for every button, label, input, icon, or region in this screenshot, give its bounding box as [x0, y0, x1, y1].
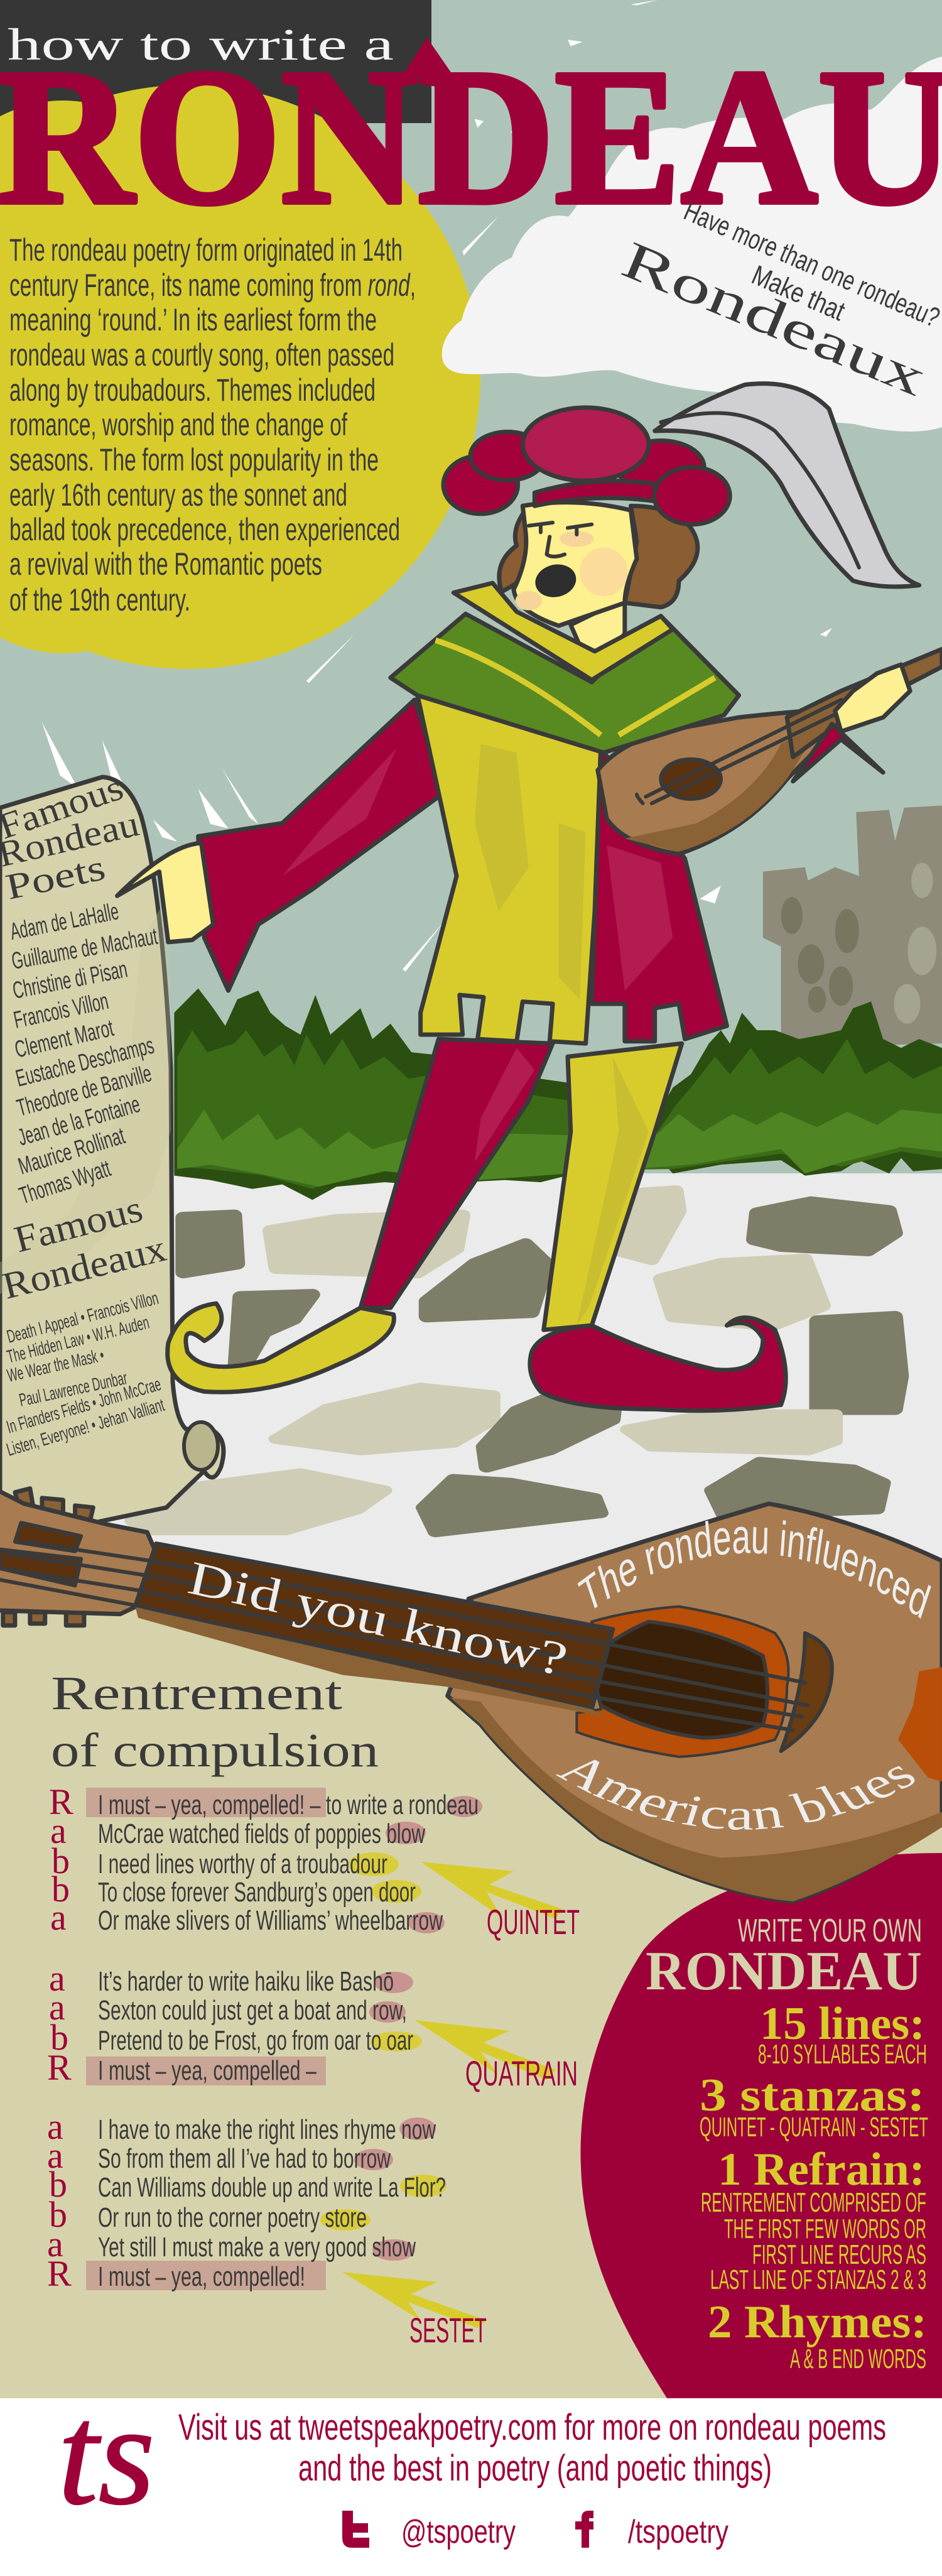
- face: [514, 503, 637, 626]
- poem stanza 3: [98, 2114, 446, 2292]
- hair: [499, 506, 698, 607]
- rhyme scheme letters: a: [47, 2106, 63, 2147]
- intro paragraph: meaning ‘round.’ In its earliest form the: [9, 302, 377, 337]
- arrow: sestet: [342, 2272, 487, 2328]
- intro paragraph: along by troubadours. Themes included: [9, 372, 376, 408]
- intro paragraph: early 16th century as the sonnet and: [9, 477, 347, 513]
- icon: twitter: [342, 2511, 369, 2548]
- list of poets: Theodore de Banville: [14, 1060, 154, 1122]
- list of poets: Christine di Pisan: [11, 956, 129, 1004]
- footer call to action: [178, 2407, 886, 2489]
- intro paragraph: seasons. The form lost popularity in the: [9, 442, 379, 477]
- facebook handle: /tspoetry: [628, 2514, 728, 2550]
- rhyme scheme letters: R: [47, 2047, 72, 2088]
- yellow curled shoe: [168, 1303, 394, 1392]
- list of poets: [8, 898, 160, 1210]
- icon: facebook: [575, 2511, 593, 2548]
- rhyme scheme letters: b: [49, 2194, 67, 2235]
- list of rondeaux: [4, 1288, 167, 1460]
- cobblestone ground: [0, 1173, 942, 1707]
- sound hole: [577, 1606, 789, 1757]
- right hand: [835, 665, 910, 732]
- poem stanza 3: Yet still I must make a very good show: [98, 2232, 416, 2263]
- rules list: 15 lines:: [760, 1998, 925, 2050]
- poem stanza 3: Or run to the corner poetry store: [98, 2202, 367, 2233]
- list of poets: Francois Villon: [11, 988, 111, 1034]
- left hand: [117, 843, 214, 942]
- curved text: the rondeau influenced: The rondeau influenced: [578, 1520, 931, 1619]
- list of rondeaux: Paul Lawrence Dunbar: [18, 1368, 129, 1411]
- sleeve: left arm: [198, 700, 445, 991]
- poem stanza 2: I must – yea, compelled –: [98, 2055, 317, 2086]
- cloud text: Rondeaux: [614, 231, 934, 408]
- poem stanza 1: To close forever Sandburg’s open door: [98, 1877, 416, 1908]
- list of rondeaux: We Wear the Mask •: [6, 1345, 106, 1386]
- red hat: [443, 408, 730, 524]
- curved text: american blues: American blues: [556, 1760, 914, 1830]
- red leg: [360, 1039, 553, 1308]
- rhyme scheme letters: b: [49, 2164, 67, 2205]
- rhyme scheme letters: R: [47, 2253, 72, 2294]
- orange patch: [898, 1667, 942, 1781]
- dark title banner: [0, 0, 431, 123]
- scroll heading: famous rondeau poets: [0, 766, 143, 908]
- scroll heading: famous rondeaux: Rondeaux: [0, 1227, 170, 1307]
- twitter handle: @tspoetry: [401, 2514, 516, 2550]
- stanza labels: [409, 1902, 580, 2350]
- intro paragraph: ballad took precedence, then experienced: [9, 512, 400, 547]
- intro paragraph: The rondeau poetry form originated in 14th: [9, 232, 403, 268]
- title kicker: how to write a: [8, 19, 394, 70]
- intro paragraph: romance, worship and the change of: [9, 407, 347, 442]
- poem stanza 1: I need lines worthy of a troubadour: [98, 1849, 387, 1879]
- lute body: [448, 1504, 942, 1901]
- cloud text: [614, 195, 942, 408]
- sage sky background: [0, 0, 942, 1256]
- footer call to action: and the best in poetry (and poetic things): [298, 2448, 772, 2489]
- list of poets: Adam de LaHalle: [8, 898, 121, 945]
- scroll heading: famous rondeaux: [0, 1188, 170, 1307]
- list of poets: Eustache Deschamps: [13, 1033, 156, 1092]
- rules list: 2 Rhymes:: [708, 2296, 927, 2348]
- feather: [655, 384, 919, 587]
- tunic: red half: [592, 748, 727, 1041]
- rules list: 3 stanzas:: [700, 2070, 925, 2121]
- poem stanza 1: Or make slivers of Williams’ wheelbarrow: [98, 1905, 443, 1936]
- rhyme scheme letters: b: [51, 1869, 70, 1910]
- intro paragraph: [9, 232, 416, 617]
- green cape with collar: [391, 583, 739, 753]
- intro paragraph: century France, its name coming from rond,: [9, 268, 416, 303]
- cloud text: Make that: [747, 259, 850, 327]
- stanza labels: QUINTET: [487, 1902, 580, 1942]
- scroll heading: famous rondeaux: Famous: [10, 1188, 147, 1261]
- rhyme scheme letters: a: [47, 2224, 63, 2264]
- rhyme scheme letters: b: [51, 1840, 70, 1881]
- scroll of famous poets: [0, 766, 224, 1523]
- yellow sun circle: [0, 85, 480, 669]
- scroll heading: famous rondeau poets: Poets: [2, 847, 109, 908]
- red curled shoe: [530, 1318, 786, 1411]
- poem stanza 3: Can Williams double up and write La Flor?: [98, 2172, 446, 2203]
- logo: ts: ts: [58, 2374, 155, 2535]
- stanza labels: QUATRAIN: [465, 2053, 578, 2093]
- small lute: [598, 649, 942, 854]
- cobblestones: [132, 1191, 901, 1532]
- arrow: quintet: [421, 1862, 562, 1919]
- poem heading: of compulsion: [51, 1724, 379, 1777]
- poem stanza 2: It’s harder to write haiku like Bashō: [98, 1966, 394, 1997]
- list of poets: Maurice Rollinat: [15, 1122, 128, 1180]
- khaki lower panel: [0, 1608, 942, 2398]
- large lute: [0, 1489, 942, 1901]
- rhyme highlights: [86, 1788, 482, 2290]
- poem stanza 1: McCrae watched fields of poppies blow: [98, 1818, 425, 1849]
- crimson write-your-own circle: [580, 1853, 942, 2398]
- tunic: yellow half: [418, 695, 601, 1043]
- poem heading: [51, 1667, 379, 1777]
- intro paragraph: a revival with the Romantic poets: [9, 546, 322, 582]
- poem stanza 3: I must – yea, compelled!: [98, 2261, 305, 2292]
- rhyme scheme letters: [47, 1781, 73, 2294]
- lute neck: [135, 1544, 613, 1709]
- list of rondeaux: Listen, Everyone! • Jehan Valliant: [4, 1395, 167, 1460]
- list of rondeaux: The Hidden Law • W.H. Auden: [5, 1313, 151, 1367]
- poem stanza 1: [98, 1790, 479, 1936]
- bridge: [781, 1633, 832, 1751]
- rhyme scheme letters: a: [49, 1958, 65, 1999]
- list of rondeaux: In Flanders Fields • John McCrae: [4, 1374, 163, 1438]
- list of poets: Thomas Wyatt: [16, 1155, 114, 1210]
- list of poets: Guillaume de Machaut: [9, 923, 160, 975]
- lute head: [0, 1489, 156, 1626]
- poem stanza 1: I must – yea, compelled! – to write a rondeau: [98, 1790, 479, 1820]
- write your own heading: RONDEAU: [646, 1941, 922, 2002]
- poem stanza 2: Sexton could just get a boat and row,: [98, 1995, 407, 2026]
- white sky streaks: [42, 0, 832, 972]
- poem stanza 2: [98, 1966, 413, 2086]
- list of poets: Jean de la Fontaine: [15, 1091, 143, 1151]
- arrow: quatrain: [414, 2020, 556, 2080]
- castle: [763, 805, 942, 1048]
- list of rondeaux: Death I Appeal • Francois Villon: [5, 1288, 161, 1347]
- list of poets: Clement Marot: [13, 1015, 116, 1063]
- poem stanza 2: Pretend to be Frost, go from oar to oar: [98, 2025, 413, 2056]
- cloud: [442, 57, 942, 432]
- right sleeve: [793, 724, 883, 781]
- rhyme scheme letters: a: [47, 2135, 63, 2176]
- white footer band: [0, 2398, 942, 2576]
- rules list: 1 Refrain:: [718, 2144, 925, 2195]
- stanza labels: SESTET: [409, 2310, 487, 2350]
- write your own heading: [646, 1913, 922, 2002]
- troubadour figure: [117, 384, 942, 1411]
- intro paragraph: rondeau was a courtly song, often passed: [9, 337, 394, 372]
- poem heading: Rentrement: [51, 1667, 342, 1720]
- yellow leg: [544, 1043, 682, 1330]
- strings: [0, 1541, 808, 1730]
- poem stanza 3: I have to make the right lines rhyme now: [98, 2114, 436, 2145]
- poem stanza 3: So from them all I’ve had to borrow: [98, 2143, 391, 2174]
- lute heading: did you know: Did you know?: [183, 1552, 572, 1687]
- hedge: [174, 989, 942, 1200]
- lute rim shading: [450, 1698, 942, 1901]
- rhyme scheme letters: b: [50, 2017, 68, 2058]
- rhyme scheme letters: a: [50, 1897, 67, 1938]
- rhyme scheme letters: R: [49, 1781, 73, 1822]
- rules list: [700, 1998, 928, 2374]
- rhyme scheme letters: a: [49, 1987, 65, 2028]
- intro paragraph: of the 19th century.: [9, 582, 190, 617]
- rhyme scheme letters: a: [50, 1810, 67, 1851]
